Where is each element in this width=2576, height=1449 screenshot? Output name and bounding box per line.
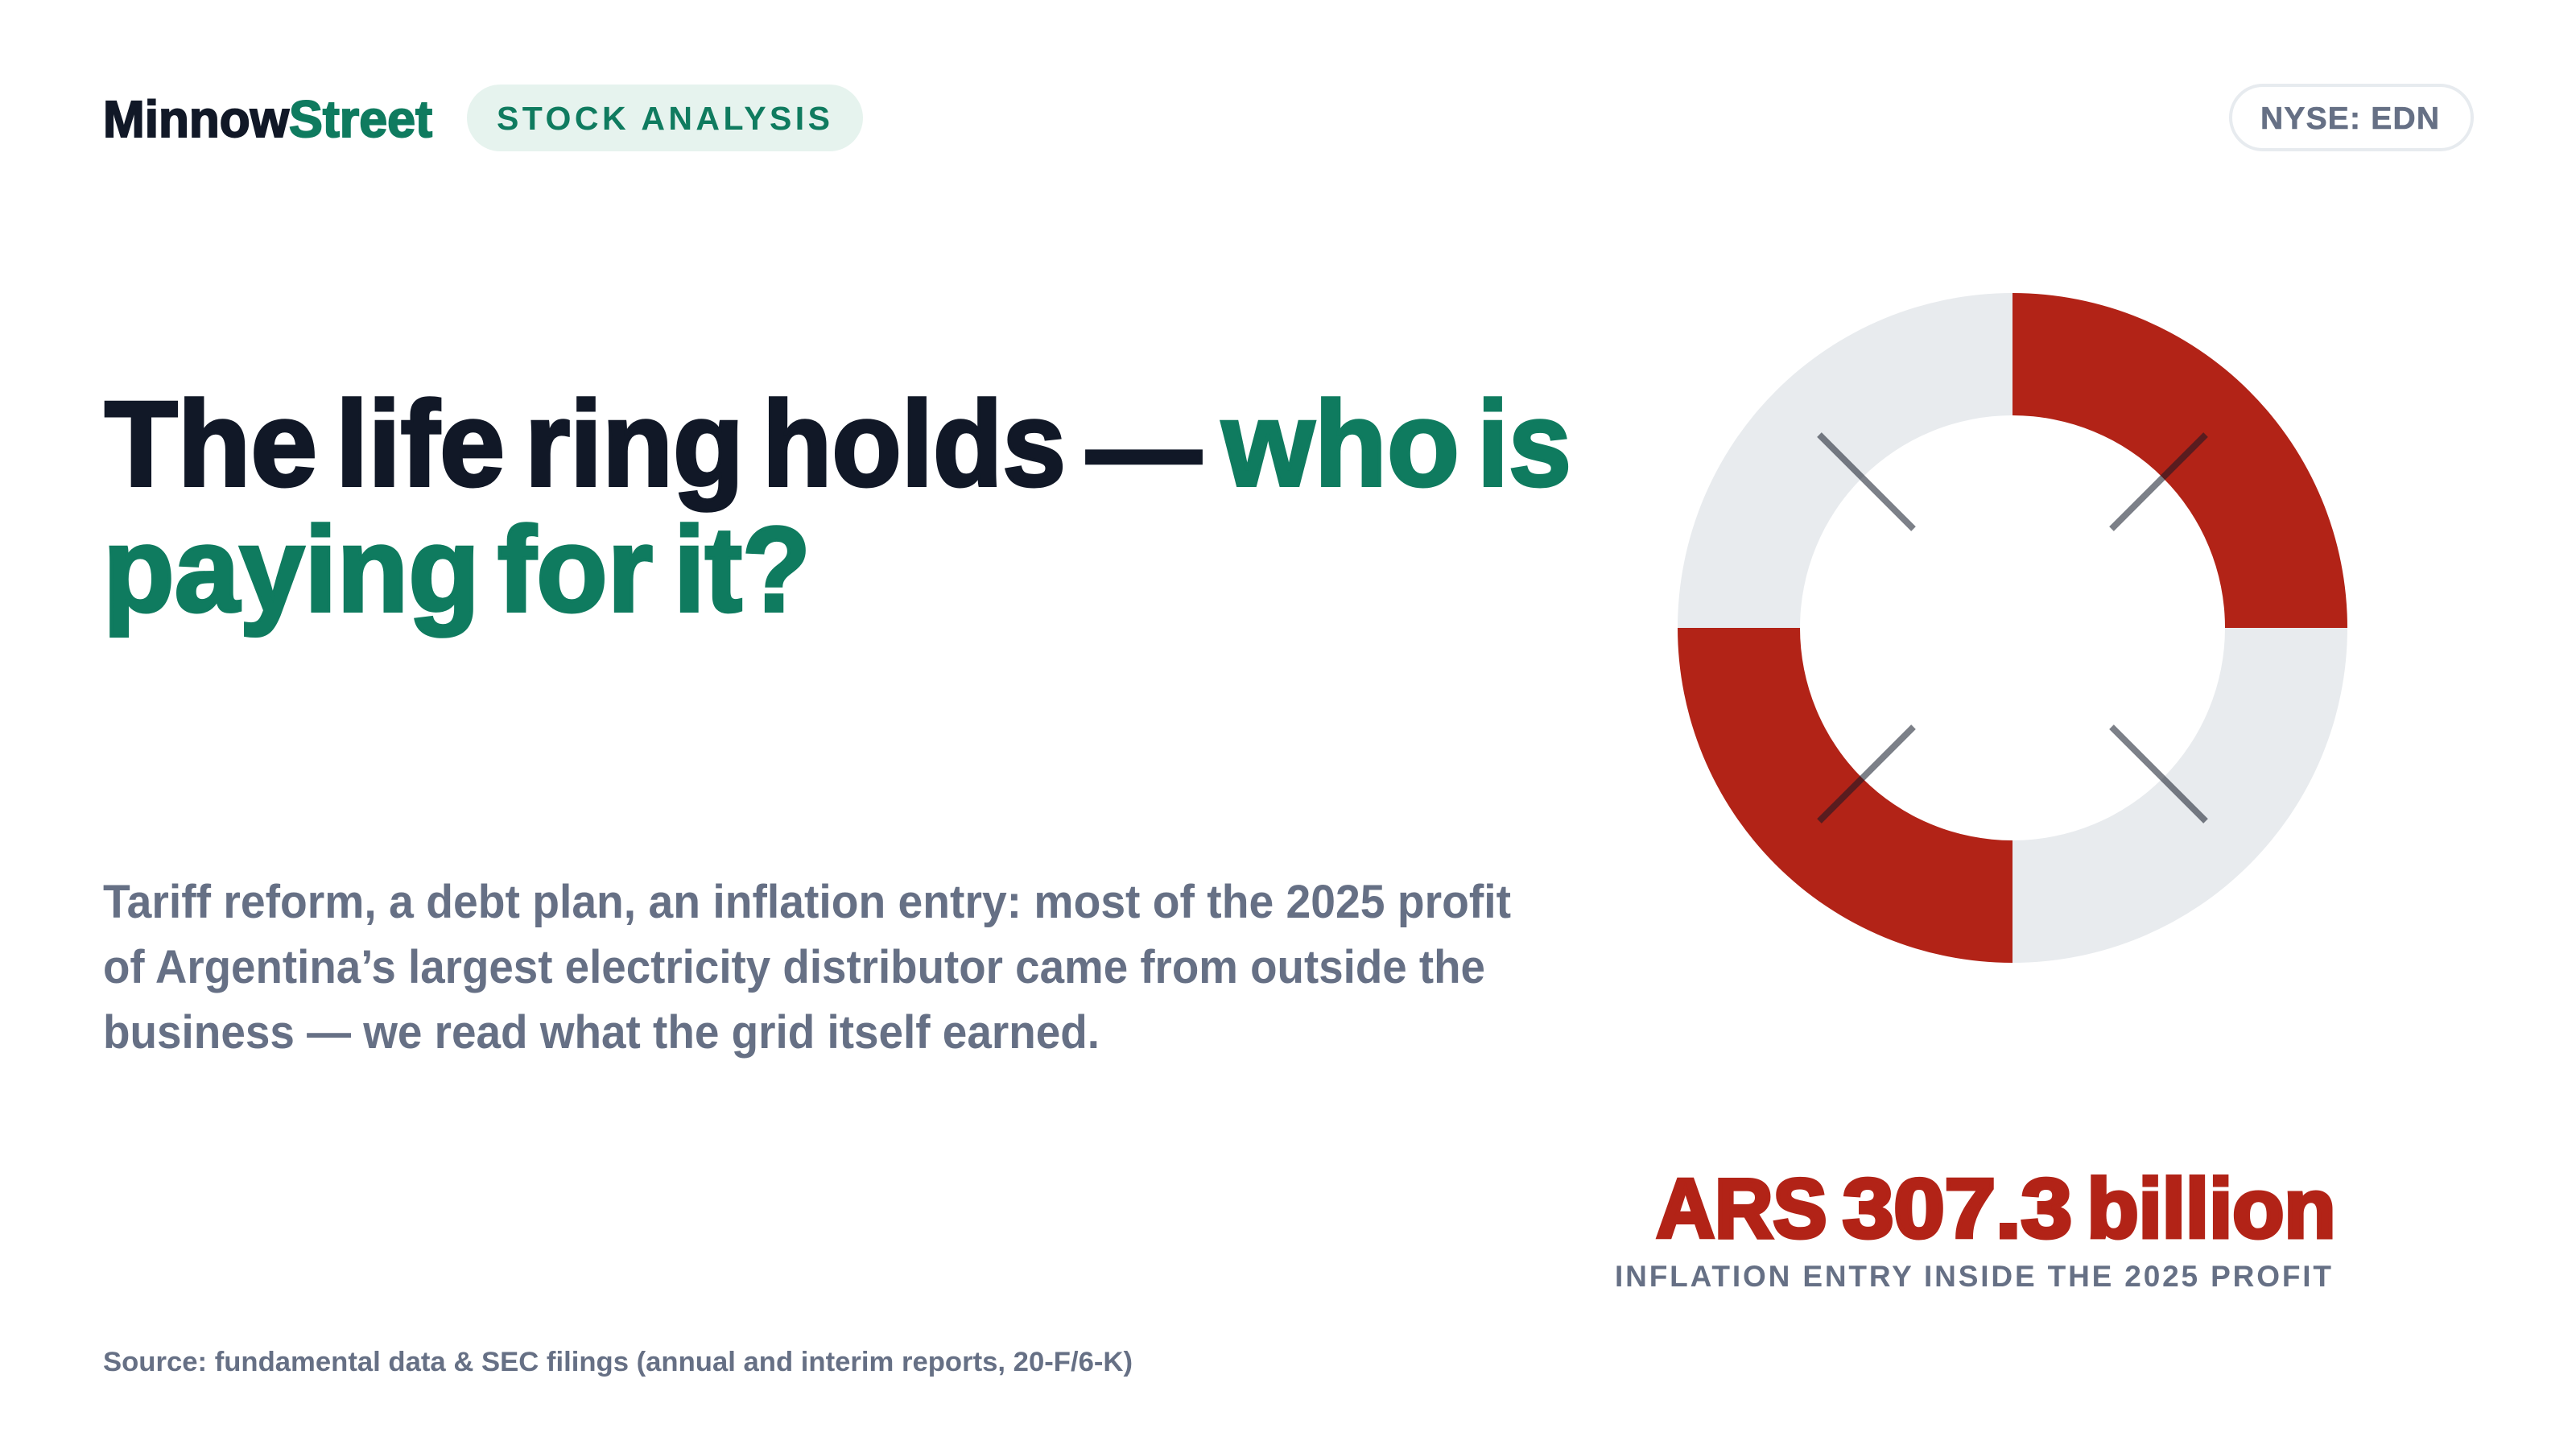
- title: is: [1477, 376, 1571, 511]
- ticker pill: [2231, 85, 2472, 150]
- brand logo: [103, 90, 432, 148]
- icon: life ring: [1678, 293, 2347, 963]
- brand logo: Minnow: [103, 90, 289, 148]
- tag: stock analysis: STOCK ANALYSIS: [497, 100, 830, 137]
- title: it?: [674, 502, 811, 637]
- key figure: [1657, 1162, 2336, 1256]
- title: —: [1087, 380, 1201, 515]
- key figure caption: INFLATION ENTRY INSIDE THE 2025 PROFIT: [1615, 1260, 2331, 1293]
- title: holds: [762, 376, 1066, 511]
- brand logo: Street: [289, 90, 432, 148]
- description paragraph: of Argentina’s largest electricity distributor came from outside the: [103, 941, 1485, 993]
- ticker pill: NYSE: EDN: [2260, 101, 2439, 136]
- key figure: billion: [2087, 1162, 2336, 1256]
- description paragraph: business — we read what the grid itself earned.: [103, 1006, 1100, 1059]
- title: paying: [103, 502, 480, 637]
- description paragraph: Tariff reform, a debt plan, an inflation entry: most of the 2025 profit: [103, 876, 1511, 928]
- title: The: [105, 376, 317, 511]
- title: life: [336, 376, 505, 511]
- source note: Source: fundamental data & SEC filings (annual and interim reports, 20-F/6-K): [103, 1347, 1133, 1377]
- title: who: [1221, 376, 1459, 511]
- key figure: ARS: [1657, 1162, 1827, 1256]
- title: for: [497, 502, 653, 637]
- tag: stock analysis: [467, 85, 863, 151]
- description paragraph: [103, 876, 1511, 1059]
- key figure: 307.3: [1843, 1162, 2072, 1256]
- title: [103, 376, 1571, 637]
- title: ring: [525, 376, 744, 511]
